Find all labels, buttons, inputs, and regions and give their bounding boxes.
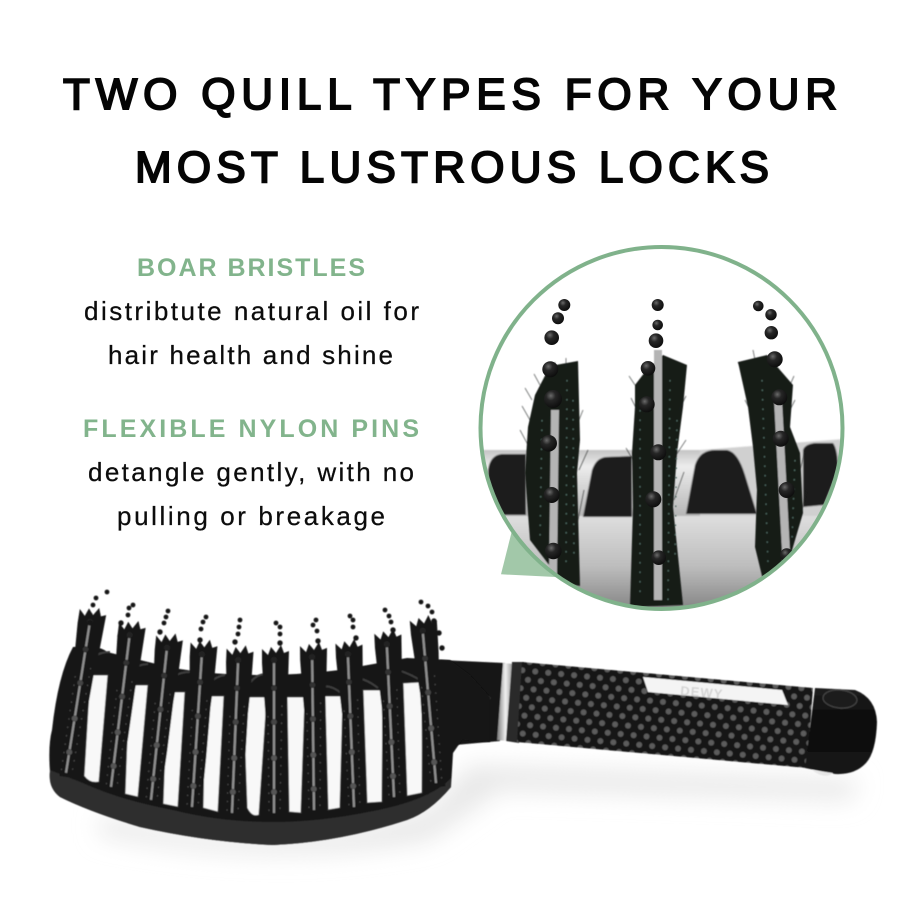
bristle tip balls <box>87 590 445 651</box>
description: boar bristles <box>84 296 419 370</box>
title: MOST LUSTROUS LOCKS <box>135 143 769 192</box>
brush handle <box>440 660 877 776</box>
brand label <box>643 677 788 705</box>
brand label: DEWY <box>680 683 724 702</box>
brush photo <box>49 590 877 854</box>
circle outline <box>480 247 842 609</box>
heading: flexible nylon pins: FLEXIBLE NYLON PINS <box>83 415 419 443</box>
heading: boar bristles: BOAR BRISTLES <box>137 254 365 282</box>
silver ring <box>497 663 514 741</box>
handle neck <box>440 660 505 745</box>
rubber grip <box>517 662 813 768</box>
description: boar bristles: hair health and shine <box>108 340 393 370</box>
brush shadow <box>100 765 860 854</box>
window slots <box>84 675 422 816</box>
callout pointer <box>501 532 556 577</box>
brush head <box>49 590 490 845</box>
handle end cap <box>805 688 877 774</box>
bristle tufts <box>54 605 451 818</box>
title <box>63 70 837 192</box>
description: nylon pins <box>88 457 414 531</box>
description: nylon pins: detangle gently, with no <box>88 457 414 487</box>
bristle tuft middle <box>626 299 687 607</box>
bristle tuft left <box>520 299 588 586</box>
text block: boar bristles <box>84 254 419 370</box>
bristle tuft right <box>738 301 807 580</box>
hanging hole <box>822 689 858 709</box>
description: boar bristles: distribtute natural oil for <box>84 296 419 326</box>
description: nylon pins: pulling or breakage <box>117 501 385 531</box>
text block: nylon pins <box>83 415 419 531</box>
lower rim <box>50 770 451 845</box>
callout: magnified bristles circle <box>480 247 844 616</box>
title: TWO QUILL TYPES FOR YOUR <box>63 70 837 119</box>
arched bridge highlights <box>84 652 420 696</box>
magnified brush detail <box>480 299 844 616</box>
